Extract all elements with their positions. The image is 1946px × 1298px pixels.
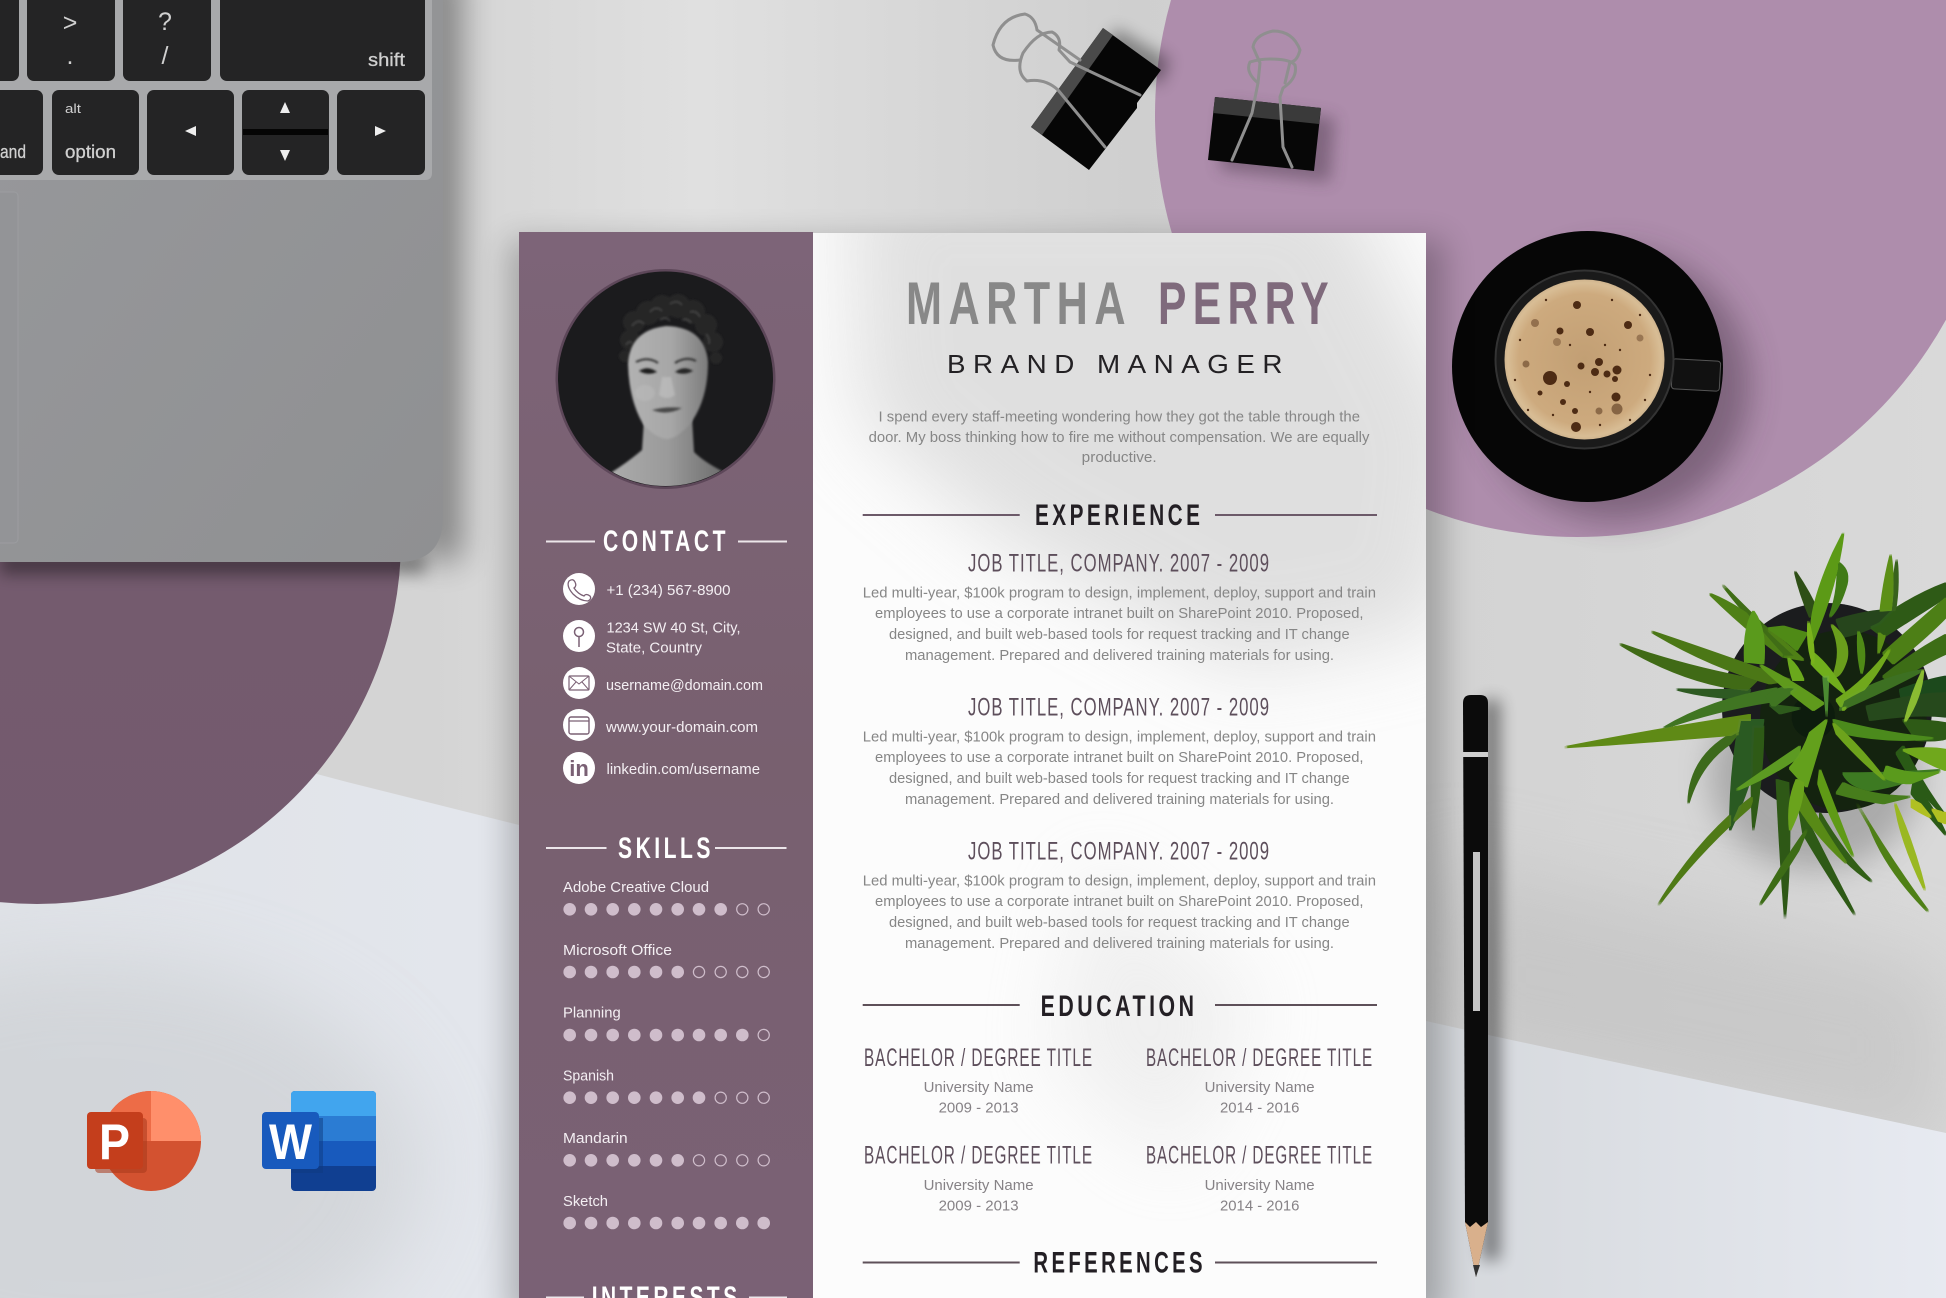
contact heading: CONTACT bbox=[603, 525, 729, 558]
purple circle lower left bbox=[0, 176, 401, 904]
job entry 1: management. Prepared and delivered training materials for using. bbox=[905, 647, 1334, 664]
skill: Spanish: Spanish bbox=[563, 1068, 614, 1085]
paper shadow bbox=[509, 240, 1444, 1298]
job entry 2 bbox=[863, 694, 1376, 808]
intro paragraph: door. My boss thinking how to fire me without compensation. We are equally bbox=[869, 429, 1370, 446]
contact: phone number: +1 (234) 567-8900 bbox=[606, 582, 730, 599]
binder clips bbox=[993, 14, 1335, 182]
curly hair bbox=[619, 294, 723, 364]
facial features bbox=[635, 359, 696, 413]
icon: Word: W bbox=[269, 1114, 313, 1170]
job entry 1: employees to use a corporate intranet built on SharePoint 2010. Proposed, bbox=[875, 605, 1364, 622]
skills heading: SKILLS bbox=[618, 832, 714, 865]
experience heading: EXPERIENCE bbox=[1035, 499, 1203, 532]
education entry: bottom right: 2014 - 2016 bbox=[1220, 1197, 1299, 1214]
job entry 3 bbox=[863, 838, 1376, 952]
contact: linkedin: linkedin.com/username bbox=[606, 761, 760, 778]
job entry 2: management. Prepared and delivered training materials for using. bbox=[905, 791, 1334, 808]
icon: linkedin bbox=[563, 752, 595, 784]
skill: Adobe Creative Cloud bbox=[563, 879, 769, 916]
skill: Microsoft Office bbox=[563, 942, 769, 978]
icon: phone bbox=[563, 573, 595, 605]
plant leaves bbox=[1565, 533, 1946, 918]
job entry 2: Led multi-year, $100k program to design, implement, deploy, support and train bbox=[863, 729, 1376, 746]
page light and shade bbox=[850, 170, 1470, 1170]
icon: Word bbox=[262, 1091, 376, 1191]
education entry: top left: University Name bbox=[924, 1079, 1034, 1096]
keyboard labels: and bbox=[0, 142, 26, 162]
keyboard labels: alt bbox=[65, 101, 81, 116]
skill: Sketch bbox=[563, 1193, 770, 1229]
education entry: top right: 2014 - 2016 bbox=[1220, 1100, 1299, 1117]
intro paragraph: I spend every staff-meeting wondering how they got the table through the bbox=[878, 409, 1360, 426]
skill: Sketch: Sketch bbox=[563, 1193, 608, 1210]
contact: address: 1234 SW 40 St, City, bbox=[606, 620, 740, 636]
education entry: top left: BACHELOR / DEGREE TITLE bbox=[864, 1044, 1093, 1072]
icon: PowerPoint bbox=[87, 1091, 201, 1191]
clip two bbox=[1208, 31, 1321, 171]
intro paragraph bbox=[869, 409, 1370, 466]
keyboard labels bbox=[0, 8, 405, 162]
keyboard labels: shift bbox=[368, 50, 405, 70]
education entry: bottom right: BACHELOR / DEGREE TITLE bbox=[1146, 1142, 1373, 1170]
job entry 1 bbox=[863, 550, 1376, 664]
skill: Microsoft Office: Microsoft Office bbox=[563, 942, 672, 959]
contact: website: www.your-domain.com bbox=[605, 719, 758, 736]
keyboard labels: option bbox=[65, 142, 116, 162]
education entry: bottom left: University Name bbox=[924, 1177, 1034, 1194]
clip one bbox=[993, 14, 1161, 170]
icon: envelope bbox=[563, 667, 595, 699]
skill: Mandarin: Mandarin bbox=[563, 1130, 628, 1147]
intro paragraph: productive. bbox=[1082, 449, 1157, 466]
education entry: bottom left bbox=[864, 1142, 1093, 1214]
education entry: bottom right bbox=[1146, 1142, 1373, 1214]
job entry 1: Led multi-year, $100k program to design, implement, deploy, support and train bbox=[863, 585, 1376, 602]
education entry: top right: University Name bbox=[1205, 1079, 1315, 1096]
job entry 3: management. Prepared and delivered training materials for using. bbox=[905, 935, 1334, 952]
name: PERRY bbox=[1158, 270, 1335, 337]
job entry 3: employees to use a corporate intranet built on SharePoint 2010. Proposed, bbox=[875, 893, 1364, 910]
coffee cup on saucer bbox=[1452, 231, 1750, 520]
resume page bbox=[519, 170, 1470, 1298]
contact: address: State, Country bbox=[606, 640, 702, 656]
education entry: bottom left: BACHELOR / DEGREE TITLE bbox=[864, 1142, 1093, 1170]
keyboard labels: ? bbox=[158, 8, 172, 36]
skill: Planning: Planning bbox=[563, 1005, 621, 1022]
keyboard keys bbox=[0, 0, 425, 175]
job entry 2: JOB TITLE, COMPANY. 2007 - 2009 bbox=[968, 694, 1270, 722]
icon: linkedin: in bbox=[569, 756, 589, 781]
job entry 3: designed, and built web-based tools for request tracking and IT change bbox=[889, 914, 1350, 931]
contact: address bbox=[606, 620, 740, 656]
job role: BRAND MANAGER bbox=[947, 349, 1290, 379]
skill: Planning bbox=[563, 1005, 769, 1041]
job entry 2: designed, and built web-based tools for request tracking and IT change bbox=[889, 770, 1350, 787]
plant pot bbox=[1722, 603, 1932, 813]
icon: PowerPoint: P bbox=[99, 1114, 130, 1170]
skill: Spanish bbox=[563, 1068, 769, 1104]
icon: browser window bbox=[563, 709, 595, 741]
portrait photo bbox=[556, 269, 776, 500]
keyboard labels: . bbox=[67, 42, 73, 70]
references heading: REFERENCES bbox=[1033, 1247, 1206, 1280]
keyboard labels: / bbox=[162, 42, 169, 70]
education entry: top right: BACHELOR / DEGREE TITLE bbox=[1146, 1044, 1373, 1072]
pencil bbox=[1463, 695, 1500, 1277]
education entry: top left bbox=[864, 1044, 1093, 1117]
job entry 3: Led multi-year, $100k program to design, implement, deploy, support and train bbox=[863, 873, 1376, 890]
job entry 1: designed, and built web-based tools for request tracking and IT change bbox=[889, 626, 1350, 643]
icon: location pin bbox=[563, 620, 595, 652]
sidebar bbox=[519, 232, 813, 1298]
education heading: EDUCATION bbox=[1041, 990, 1198, 1023]
job entry 1: JOB TITLE, COMPANY. 2007 - 2009 bbox=[968, 550, 1270, 578]
neck and shoulders bbox=[612, 419, 722, 486]
education entry: bottom left: 2009 - 2013 bbox=[939, 1197, 1019, 1214]
education entry: top left: 2009 - 2013 bbox=[939, 1100, 1019, 1117]
contact: email: username@domain.com bbox=[606, 677, 763, 694]
potted plant bbox=[1565, 533, 1946, 918]
purple circle upper right bbox=[1155, 0, 1946, 537]
skill: Adobe Creative Cloud: Adobe Creative Cloud bbox=[563, 879, 709, 896]
education entry: top right bbox=[1146, 1044, 1373, 1117]
job entry 3: JOB TITLE, COMPANY. 2007 - 2009 bbox=[968, 838, 1270, 866]
face bbox=[628, 326, 708, 439]
skill: Mandarin bbox=[563, 1130, 769, 1167]
keyboard labels: > bbox=[63, 9, 77, 37]
laptop bbox=[0, 0, 462, 574]
name: MARTHA bbox=[906, 270, 1132, 337]
job entry 2: employees to use a corporate intranet built on SharePoint 2010. Proposed, bbox=[875, 749, 1364, 766]
coffee bubbles bbox=[1514, 299, 1651, 432]
education entry: bottom right: University Name bbox=[1205, 1177, 1315, 1194]
